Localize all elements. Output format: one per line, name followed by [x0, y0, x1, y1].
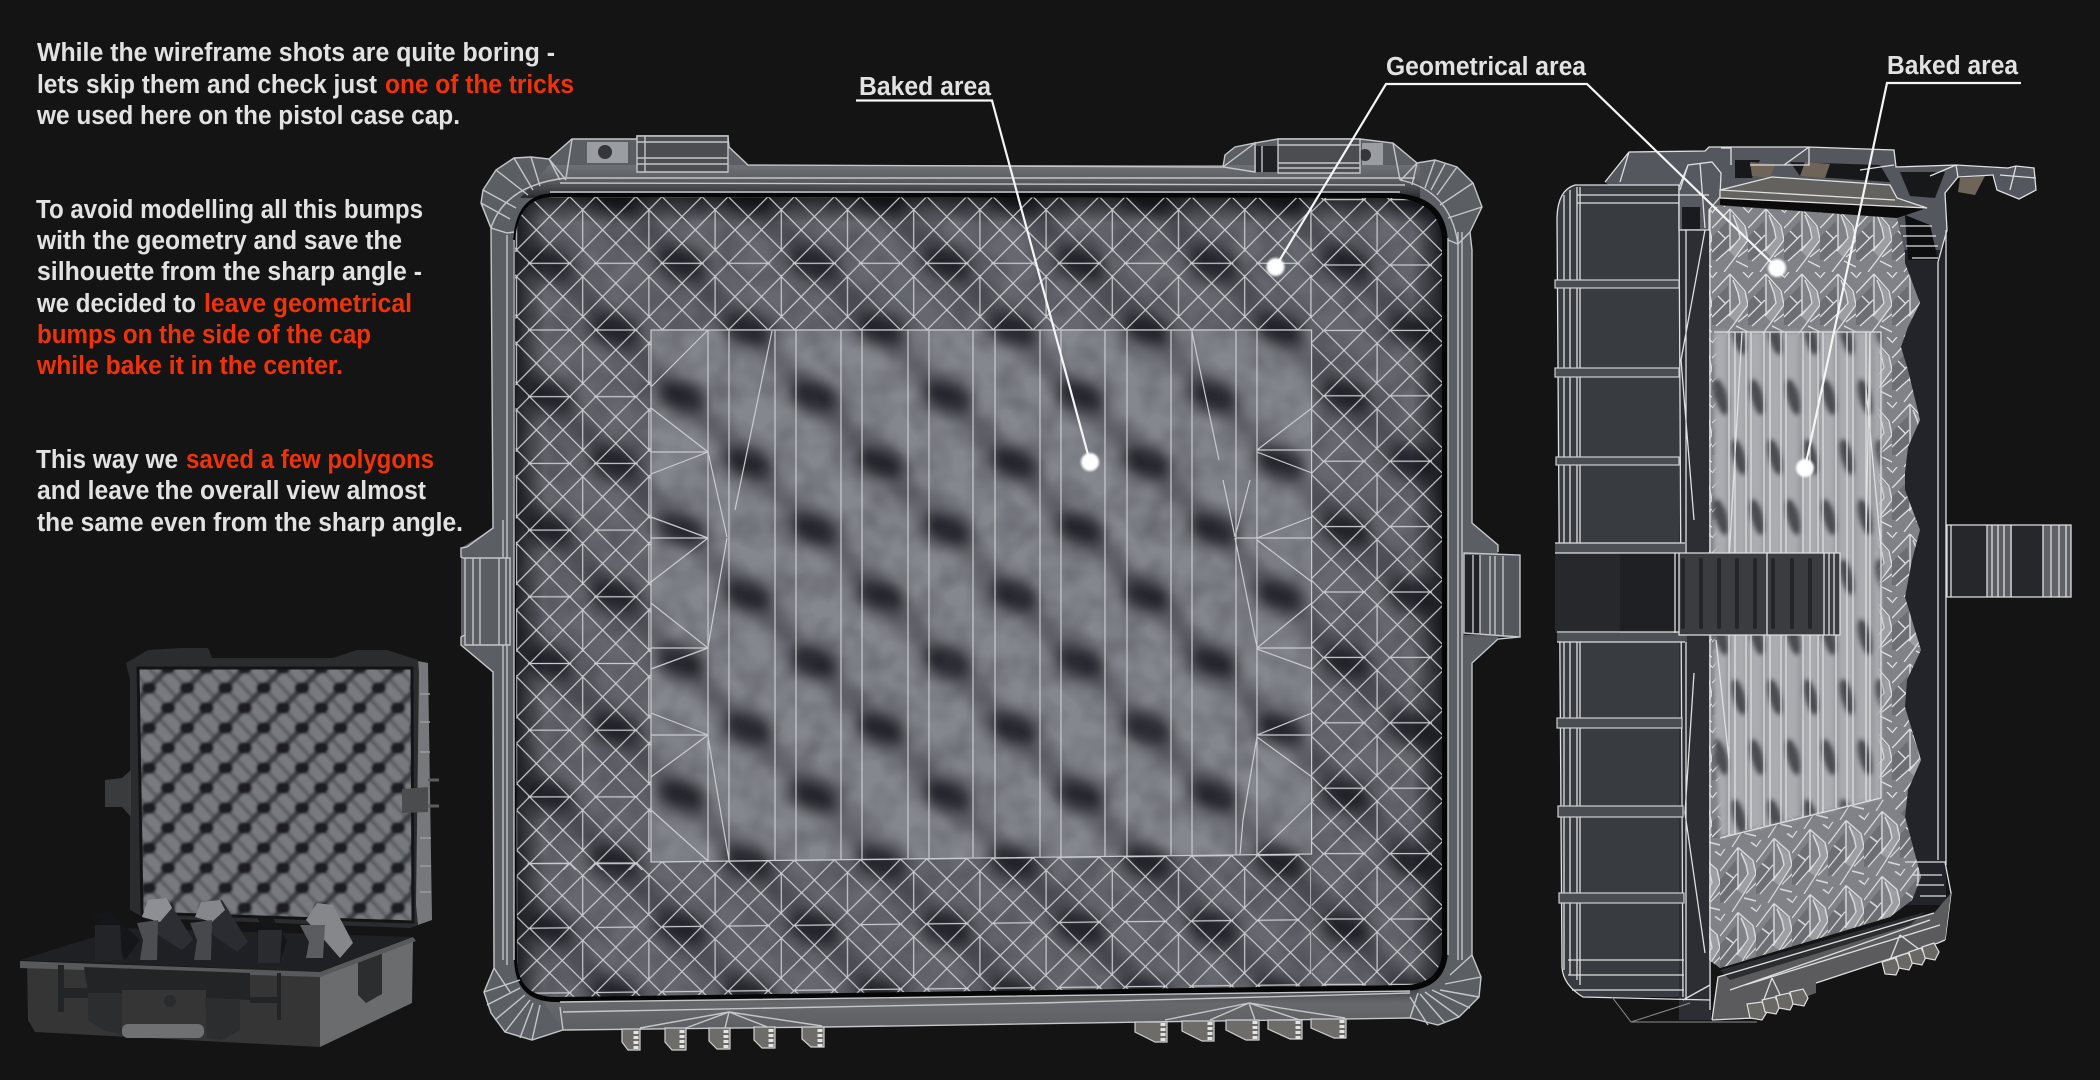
text block: intro	[36, 39, 574, 130]
text block: intro: While the wireframe shots are quite boring -	[37, 39, 555, 67]
callout: baked area on front view	[856, 73, 1099, 471]
text block: explanation: while bake it in the center.	[36, 352, 343, 380]
wall ribs	[1555, 280, 1684, 903]
foam lip	[1720, 177, 1927, 208]
panel: side view wireframe	[1555, 147, 2071, 1022]
case rim	[20, 937, 416, 977]
top right latch	[1223, 139, 1383, 173]
callout: baked area on front view: Baked area	[859, 73, 992, 101]
bottom ghost outline	[1612, 997, 1757, 1022]
callout: geometrical area on both views: Geometrical area	[1386, 53, 1587, 81]
text block: explanation: we decided to	[36, 290, 196, 318]
case front face	[27, 963, 320, 1047]
pistol 4	[257, 917, 287, 963]
outer wall wire lines	[1557, 185, 1946, 1010]
text block: conclusion: and leave the overall view almost	[37, 477, 426, 505]
wire: right geometrical band	[1312, 197, 1446, 987]
text block: explanation: with the geometry and save the	[36, 227, 402, 255]
lid frame	[126, 648, 419, 928]
text block: explanation	[36, 196, 423, 380]
pistol 1	[92, 912, 140, 962]
right inner wall	[1890, 250, 1946, 905]
right side tab	[1464, 553, 1520, 637]
text block: conclusion: the same even from the sharp angle.	[37, 509, 463, 537]
callout: geometrical area on both views	[1266, 53, 1786, 277]
lid foam	[140, 670, 412, 920]
wire: central baked area verticals and fans	[651, 330, 1314, 862]
text block: intro: lets skip them and check just	[37, 71, 377, 99]
foam geometry	[1709, 205, 1921, 968]
frame silhouette	[461, 136, 1498, 1040]
left side tab	[465, 558, 511, 645]
pistol 3	[190, 900, 248, 960]
bottom left teeth	[622, 1027, 824, 1050]
inner wall	[1679, 210, 1711, 1020]
wire: top geometrical band	[515, 197, 1312, 330]
back shell upper	[1605, 147, 2036, 262]
bottom bar	[540, 985, 1420, 1030]
right hanging latch	[1947, 525, 2071, 597]
lid right side	[412, 660, 432, 926]
lid post	[1679, 162, 1721, 230]
text block: explanation: leave geometrical	[204, 290, 412, 318]
lock button	[164, 995, 176, 1007]
text block: conclusion: saved a few polygons	[186, 446, 434, 474]
text block: conclusion	[36, 446, 463, 537]
bottom lip	[1712, 893, 1951, 1020]
lid latches	[105, 770, 131, 817]
text block: intro: we used here on the pistol case cap.	[36, 102, 460, 130]
text block: explanation: To avoid modelling all this bumps	[36, 196, 423, 224]
text block: explanation: silhouette from the sharp angle -	[37, 258, 422, 286]
wire: bottom geometrical band	[515, 854, 1311, 1000]
text block: explanation: bumps on the side of the cap	[37, 321, 371, 349]
outer left wall	[1557, 185, 1683, 997]
case front latches and straps	[58, 965, 281, 1020]
frame wire lines	[461, 136, 1519, 1040]
bottom right teeth	[1135, 1019, 1346, 1042]
callout: baked area on side view	[1796, 52, 2021, 477]
black gutter	[513, 193, 1448, 1002]
callout: baked area on side view: Baked area	[1887, 52, 2019, 80]
foam: baked shading	[515, 197, 1442, 997]
top left latch	[587, 136, 728, 172]
bottom teeth	[1747, 943, 1939, 1020]
top bar	[520, 165, 1420, 198]
side latch band	[1555, 543, 1840, 642]
pistol 2	[137, 898, 193, 960]
panel: beauty render of open pistol case	[20, 648, 439, 1047]
text block: intro: one of the tricks	[385, 71, 574, 99]
pistol 5	[300, 903, 353, 958]
foam bottom geometry	[1709, 798, 1921, 968]
case right face	[320, 940, 413, 1047]
wire: left geometrical band	[515, 330, 651, 870]
top hinge outline	[1605, 147, 2036, 262]
case handle	[122, 1024, 204, 1038]
text block: conclusion: This way we	[36, 446, 178, 474]
baked wire lines	[1714, 332, 1881, 838]
bottom right corner of frame	[1905, 862, 1951, 940]
panel: main cap wireframe front view	[460, 136, 1520, 1050]
baked stripes	[1714, 332, 1881, 838]
case inner base	[20, 928, 413, 972]
